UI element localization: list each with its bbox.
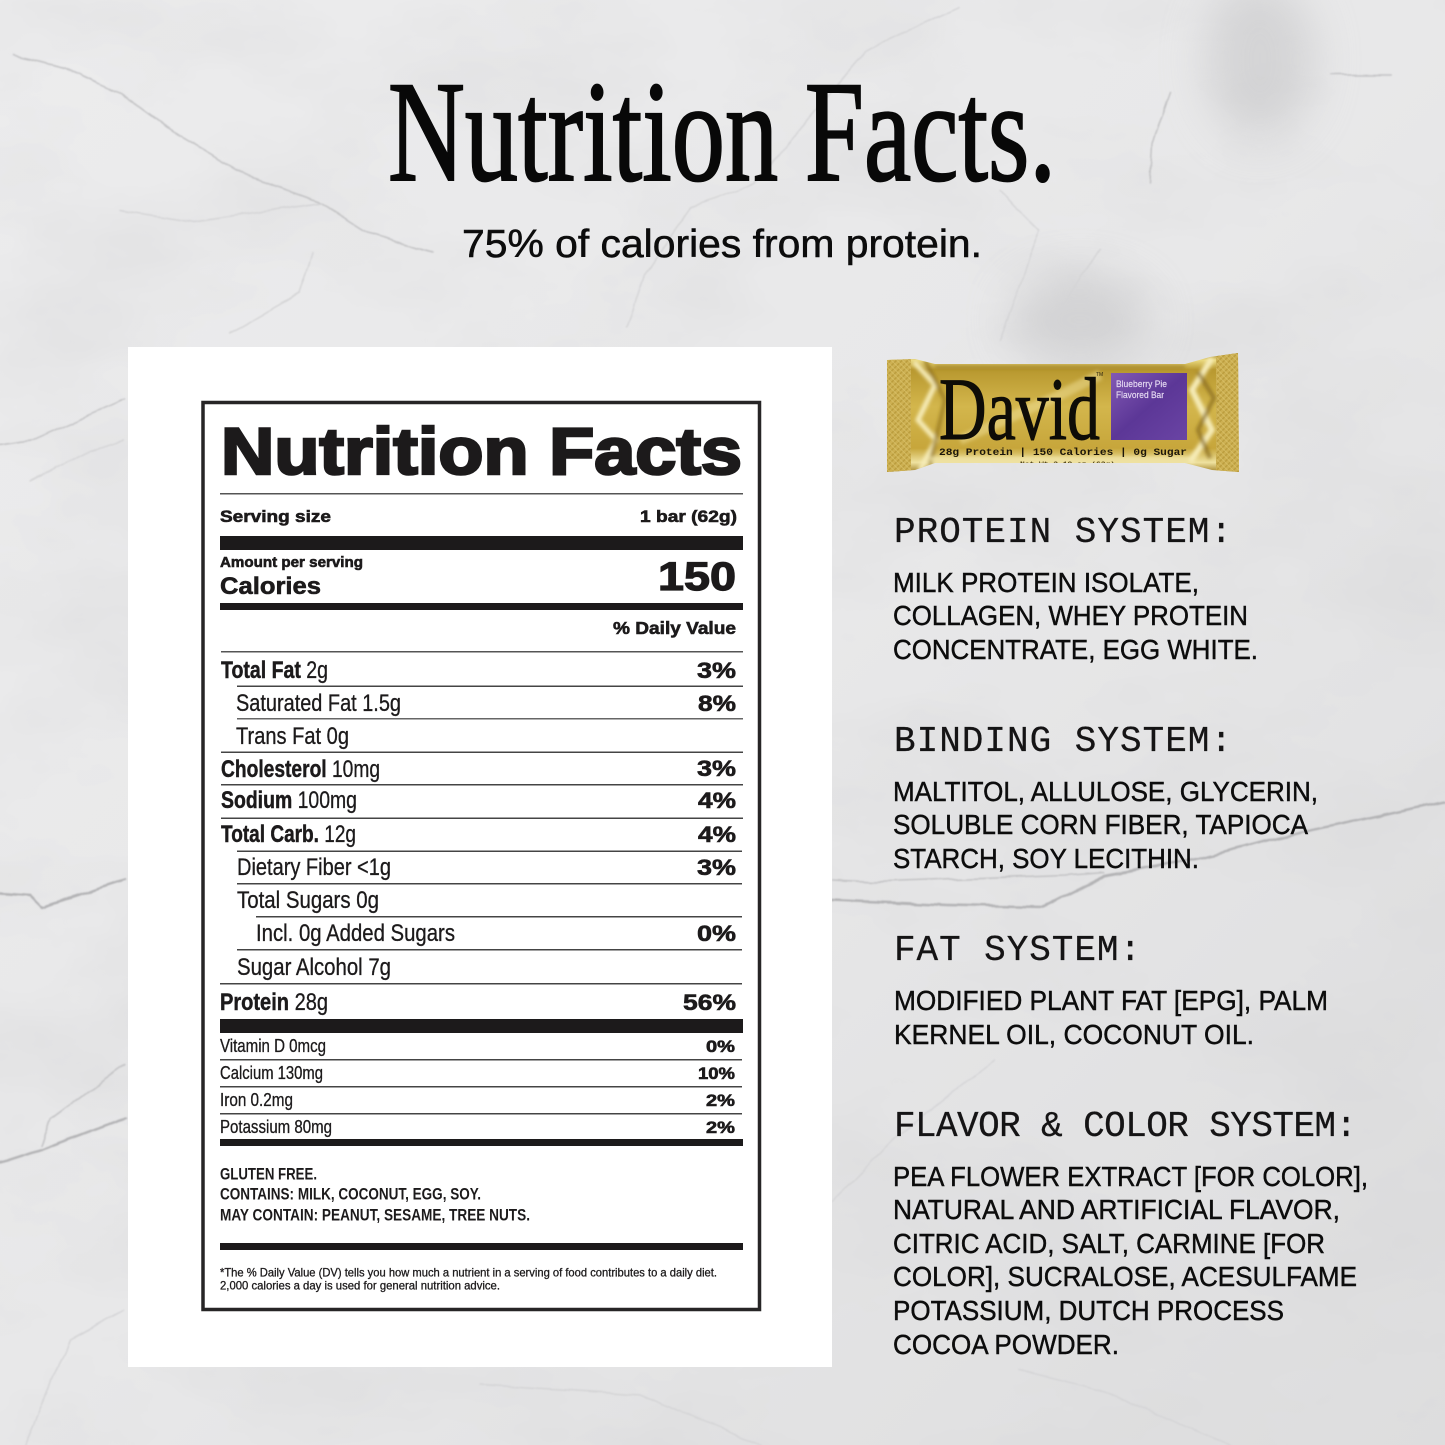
calories: 150 xyxy=(658,555,736,599)
section: binding system: SOLUBLE CORN FIBER, TAPIOCA xyxy=(893,809,1308,840)
section: protein system: PROTEIN SYSTEM: xyxy=(894,512,1232,553)
section: fat system: FAT SYSTEM: xyxy=(894,930,1141,971)
section: flavor and color system: NATURAL AND ARTIFICIAL FLAVOR, xyxy=(893,1194,1340,1225)
nutrient rows: Saturated Fat 1.5g xyxy=(236,690,401,717)
nutrient rows: Incl. 0g Added Sugars xyxy=(256,920,455,947)
section: flavor and color system: CITRIC ACID, SALT, CARMINE [FOR xyxy=(893,1228,1325,1259)
wrapper flavor box: Blueberry Pie xyxy=(1116,379,1167,390)
nutrient rows: Trans Fat 0g xyxy=(236,723,349,750)
nutrient rows: Sugar Alcohol 7g xyxy=(237,954,391,981)
section: binding system: MALTITOL, ALLULOSE, GLYCERIN, xyxy=(893,776,1318,807)
label heading: Nutrition Facts xyxy=(221,414,742,488)
section: binding system xyxy=(893,721,1318,874)
section: flavor and color system: COLOR], SUCRALOSE, ACESULFAME xyxy=(893,1261,1357,1292)
label border xyxy=(203,402,760,1310)
allergen statement: GLUTEN FREE. xyxy=(220,1164,317,1184)
subtitle: 75% of calories from protein. xyxy=(462,223,982,266)
wrapper flavor box: Flavored Bar xyxy=(1116,390,1164,401)
wrapper logo: David xyxy=(939,361,1100,459)
vitamins and minerals: Iron 0.2mg xyxy=(220,1090,293,1110)
calories: Calories xyxy=(220,573,321,600)
vitamins and minerals: 2% xyxy=(706,1091,735,1110)
percent values: 8% xyxy=(698,691,736,716)
nutrient rows: Dietary Fiber <1g xyxy=(237,854,391,881)
nutrient rows: Cholesterol 10mg xyxy=(221,756,380,783)
percent values: 4% xyxy=(698,822,736,847)
allergen statement: CONTAINS: MILK, COCONUT, EGG, SOY. xyxy=(220,1184,481,1204)
rule lines xyxy=(220,493,743,1250)
section: flavor and color system: COCOA POWDER. xyxy=(893,1329,1119,1360)
section: flavor and color system: POTASSIUM, DUTCH PROCESS xyxy=(893,1295,1284,1326)
nutrient rows: Total Fat 2g xyxy=(221,657,328,684)
vitamins and minerals xyxy=(220,1036,735,1137)
allergen statement: MAY CONTAIN: PEANUT, SESAME, TREE NUTS. xyxy=(220,1206,530,1224)
serving size xyxy=(220,507,737,526)
vitamins and minerals: Vitamin D 0mcg xyxy=(220,1036,326,1056)
daily value header: % Daily Value xyxy=(613,618,736,638)
section: protein system: COLLAGEN, WHEY PROTEIN xyxy=(893,600,1248,631)
calories xyxy=(220,554,736,600)
percent values: 3% xyxy=(697,658,736,683)
section: binding system: BINDING SYSTEM: xyxy=(894,721,1232,762)
section: protein system: MILK PROTEIN ISOLATE, xyxy=(893,567,1199,598)
section: fat system: KERNEL OIL, COCONUT OIL. xyxy=(894,1019,1254,1050)
percent values: 56% xyxy=(683,990,736,1015)
section: flavor and color system: FLAVOR & COLOR SYSTEM: xyxy=(894,1106,1357,1147)
nutrient rows: Total Sugars 0g xyxy=(237,887,379,914)
footnote xyxy=(220,1266,717,1292)
serving size: 1 bar (62g) xyxy=(640,507,737,526)
footnote: 2,000 calories a day is used for general nutrition advice. xyxy=(220,1278,500,1292)
section: fat system: MODIFIED PLANT FAT [EPG], PALM xyxy=(894,985,1328,1016)
percent values: 3% xyxy=(697,756,736,781)
section: fat system xyxy=(894,930,1328,1050)
serving size: Serving size xyxy=(220,507,331,526)
section: binding system: STARCH, SOY LECITHIN. xyxy=(893,843,1199,874)
section: flavor and color system: PEA FLOWER EXTRACT [FOR COLOR], xyxy=(893,1161,1368,1192)
footnote: *The % Daily Value (DV) tells you how much a nutrient in a serving of food contributes to a daily diet. xyxy=(220,1266,717,1280)
calories: Amount per serving xyxy=(220,554,363,571)
nutrient rows xyxy=(220,657,455,1016)
vitamins and minerals: 10% xyxy=(698,1064,735,1083)
vitamins and minerals: Potassium 80mg xyxy=(220,1117,332,1137)
icon: David protein bar wrapper xyxy=(887,350,1239,475)
wrapper flavor box xyxy=(1111,373,1187,440)
wrapper trademark: TM xyxy=(1096,372,1103,378)
vitamins and minerals: 2% xyxy=(706,1118,735,1137)
title: Nutrition Facts. xyxy=(388,53,1056,212)
section: flavor and color system xyxy=(893,1106,1368,1360)
panel: nutrition label card xyxy=(128,347,832,1367)
vitamins and minerals: Calcium 130mg xyxy=(220,1063,323,1083)
nutrient rows: Protein 28g xyxy=(220,989,328,1016)
wrapper net weight: Net Wt 2.18 oz (62g) xyxy=(1020,461,1115,468)
vitamins and minerals: 0% xyxy=(706,1037,735,1056)
wrapper claims: 28g Protein | 150 Calories | 0g Sugar xyxy=(939,447,1187,459)
section: protein system: CONCENTRATE, EGG WHITE. xyxy=(893,634,1258,665)
nutrient rows: Sodium 100mg xyxy=(221,787,357,814)
percent values: 4% xyxy=(698,788,736,813)
percent values xyxy=(683,658,736,1015)
nutrient rows: Total Carb. 12g xyxy=(221,821,356,848)
section: protein system xyxy=(893,512,1258,665)
allergen statement xyxy=(220,1164,530,1224)
percent values: 0% xyxy=(697,921,736,946)
percent values: 3% xyxy=(697,855,736,880)
